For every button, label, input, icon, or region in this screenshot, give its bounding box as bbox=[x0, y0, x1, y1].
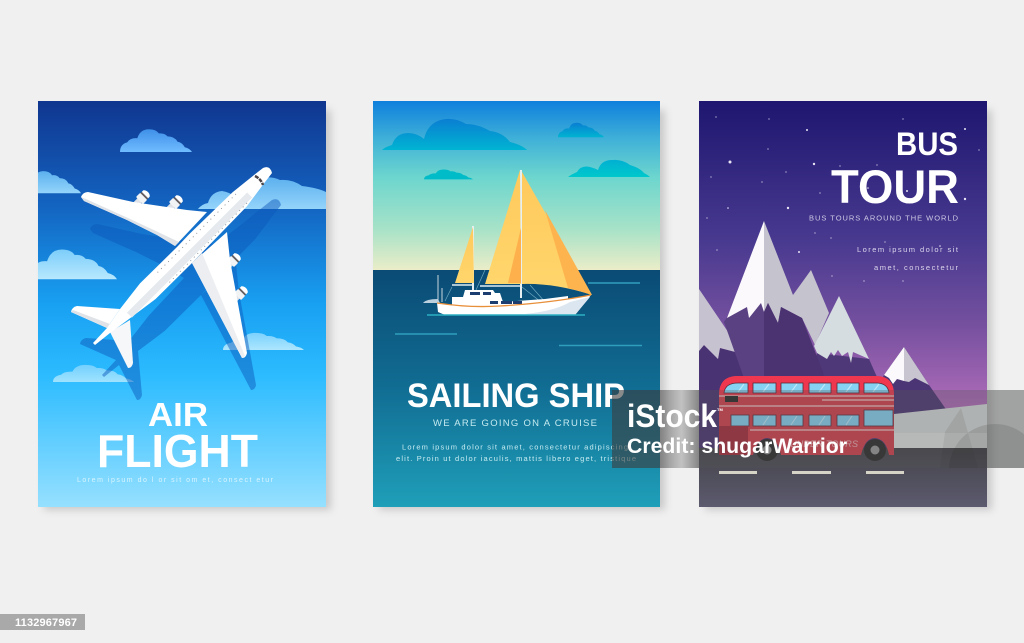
bus tour body text: amet, consectetur bbox=[874, 263, 958, 272]
tail upper bbox=[71, 306, 120, 328]
cloud top bbox=[120, 129, 192, 152]
rigging bbox=[445, 270, 545, 302]
dinghy bbox=[423, 299, 440, 303]
waterline bbox=[427, 314, 585, 316]
small sail bbox=[455, 227, 474, 283]
window glints bbox=[738, 384, 879, 425]
sailing ship body text: Lorem ipsum dolor sit amet, consectetur adipiscing bbox=[402, 442, 628, 452]
bus tour subtitle: BUS TOURS AROUND THE WORLD bbox=[809, 214, 959, 222]
air flight title: FLIGHT bbox=[97, 425, 258, 477]
third mountain snow bbox=[814, 296, 869, 363]
jib sail bbox=[485, 170, 521, 284]
sailing ship title: SAILING SHIP bbox=[407, 377, 625, 415]
cloud right bbox=[568, 160, 650, 177]
poster shadows bbox=[44, 110, 992, 510]
cloud left middle bbox=[38, 250, 117, 280]
watermark text: Credit: shugarWarrior bbox=[627, 435, 847, 458]
cloud left upper bbox=[38, 171, 81, 194]
panel: sailing ship poster bbox=[373, 101, 660, 507]
image id tag: 1132967967 bbox=[15, 617, 77, 629]
hill and road bbox=[699, 404, 987, 507]
stars bbox=[706, 116, 980, 282]
air flight caption: Lorem ipsum do l or sit om et, consect etur bbox=[77, 477, 274, 484]
hull bbox=[437, 295, 591, 315]
cloud right lower bbox=[223, 333, 304, 350]
big mountain body bbox=[724, 303, 835, 450]
fuselage bbox=[93, 167, 272, 345]
roof bbox=[719, 376, 894, 395]
big mountain snow bbox=[727, 221, 764, 318]
watermark text: TM bbox=[717, 407, 723, 412]
air flight title bbox=[100, 403, 258, 468]
masts bbox=[473, 170, 521, 298]
plane shadow bbox=[80, 199, 281, 400]
upper windows bbox=[724, 383, 889, 393]
bus tour title: BUS bbox=[896, 126, 958, 162]
small peak bbox=[872, 347, 950, 450]
watermark text: iStock bbox=[627, 398, 717, 434]
main sail bbox=[522, 172, 592, 295]
sailing ship body text: elit. Proin ut dolor iaculis, mattis libero eget, tristique bbox=[396, 454, 636, 463]
large cloud bbox=[382, 119, 527, 150]
air flight title: AIR bbox=[148, 396, 208, 433]
bus tour title bbox=[831, 126, 959, 213]
cockpit bbox=[255, 176, 263, 185]
watermark text bbox=[627, 398, 847, 458]
wing upper bbox=[81, 192, 207, 246]
road dashes bbox=[719, 471, 904, 474]
third mountain body bbox=[800, 353, 900, 450]
destination board bbox=[725, 396, 738, 402]
mountains bbox=[699, 221, 950, 450]
cloud behind plane bbox=[198, 177, 326, 209]
airplane bbox=[71, 167, 272, 368]
cabin bbox=[452, 290, 568, 306]
panel: bus tour poster bbox=[699, 101, 987, 507]
sailboat bbox=[423, 170, 592, 315]
bus door bbox=[719, 426, 748, 455]
bus body bbox=[719, 376, 894, 455]
engines bbox=[131, 189, 249, 305]
double decker bus bbox=[719, 376, 894, 461]
big mountain right face and back mountain bbox=[764, 221, 829, 345]
sailing ship body text bbox=[396, 442, 636, 463]
sailing ship subtitle: WE ARE GOING ON A CRUISE bbox=[433, 418, 597, 429]
image id tag bbox=[0, 614, 85, 630]
panel: air flight poster bbox=[18, 101, 326, 507]
lower windows bbox=[731, 410, 893, 426]
small cloud top right bbox=[558, 123, 604, 137]
left mountain bbox=[699, 345, 775, 450]
bus tour body text: Lorem ipsum dolor sit bbox=[857, 245, 959, 254]
bus side lettering: UNDER TOURS bbox=[790, 439, 858, 449]
small cloud left bbox=[424, 170, 473, 179]
cloud bottom left bbox=[53, 365, 134, 382]
windows bbox=[155, 194, 236, 275]
bus tour title: TOUR bbox=[831, 160, 959, 213]
wheels bbox=[756, 439, 886, 461]
waves bbox=[395, 283, 642, 346]
watermark band bbox=[612, 390, 1024, 516]
bus tour body text bbox=[857, 245, 959, 272]
tail lower bbox=[110, 320, 133, 368]
wing lower bbox=[192, 232, 247, 358]
body stripes bbox=[719, 396, 894, 430]
